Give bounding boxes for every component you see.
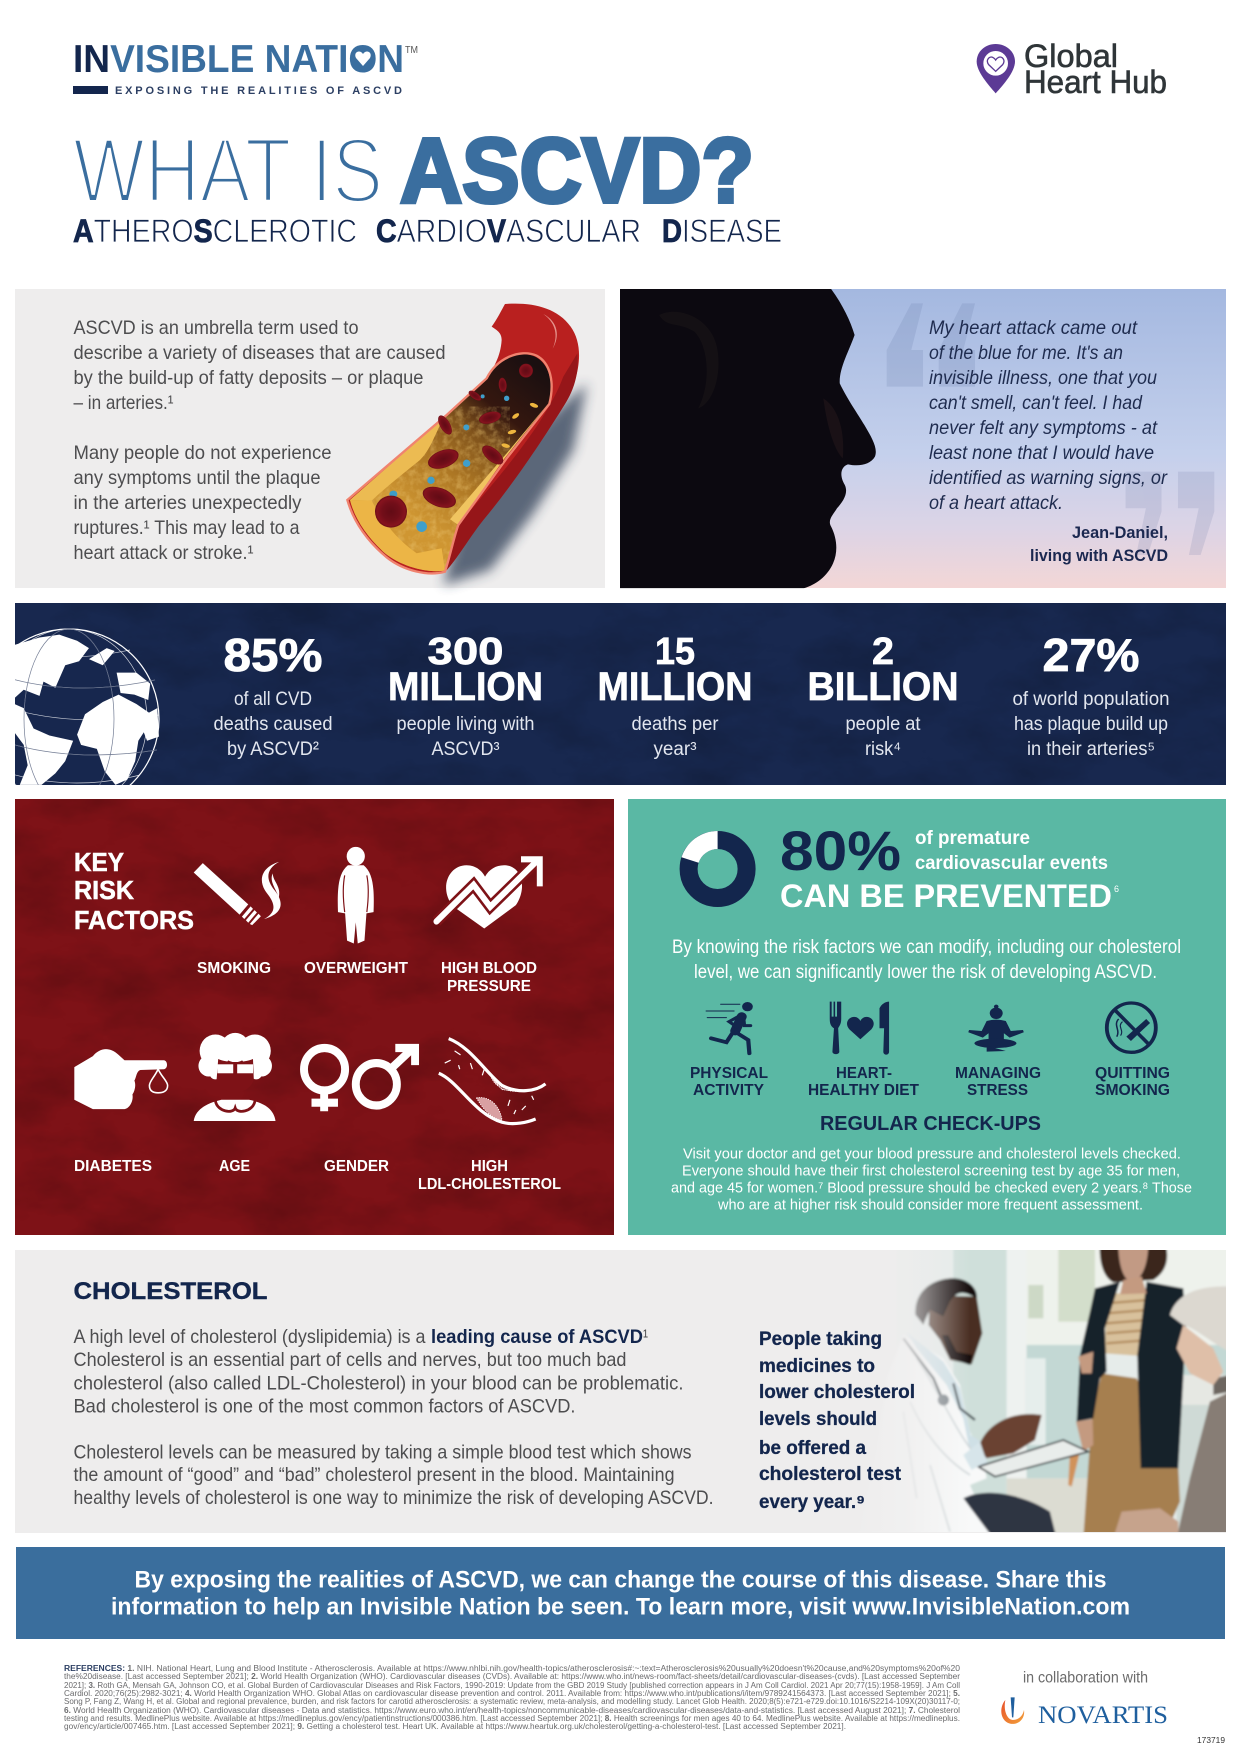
text block: intro: level, we can significantly lower the risk of developing ASCVD. (694, 962, 1157, 983)
panel: key risk factors (15, 799, 614, 1235)
subtitle (73, 213, 782, 249)
headline: 80% can be prevented: cardiovascular events (915, 853, 1108, 874)
subtitle: ATHEROSCLEROTIC (73, 213, 357, 249)
attribution: Jean-Daniel, (1072, 523, 1168, 542)
title: WHAT IS (73, 120, 383, 222)
references: 6. World Health Organization (WHO). Cardiovascular diseases - Data and statistics. https://www.euro.who.int/en/health-topics/noncommunicable-diseases/cardiovascular-diseases/data-and-statistics. [Last accessed August 2021]; 7. Cholesterol (64, 1706, 960, 1715)
text block: cholesterol explanation: Bad cholesterol is one of the most common factors of ASCVD. (74, 1396, 576, 1418)
panel: patient quote (620, 289, 1226, 588)
stat: 2 billion (808, 631, 958, 760)
logo: Invisible Nation: TM (405, 45, 418, 56)
icon: high blood pressure (436, 856, 543, 928)
labels: actions: HEALTHY DIET (808, 1082, 920, 1099)
attribution: living with ASCVD (1030, 546, 1168, 565)
text block: definition: in the arteries unexpectedly (74, 492, 302, 514)
headline: 80% can be prevented: 6 (1114, 884, 1119, 894)
icon: diabetes (74, 1049, 168, 1109)
callout: yearly test: be offered a (759, 1438, 866, 1459)
stat: 15 million: deaths per (632, 714, 719, 735)
stat: 27%: 27% (1042, 629, 1140, 681)
stat: 15 million: 15 (655, 631, 695, 673)
logo: Global Heart Hub (977, 38, 1167, 100)
logo: Global Heart Hub: Global (1024, 38, 1118, 74)
stat: 85%: of all CVD (234, 689, 312, 710)
logo: Novartis (1001, 1697, 1168, 1729)
callout: yearly test: People taking (759, 1329, 882, 1350)
stat: 85%: deaths caused (214, 714, 332, 735)
job code: 173719 (1197, 1736, 1226, 1745)
text block: quote: least none that I would have (929, 442, 1154, 464)
text block: cholesterol explanation: Cholesterol is an essential part of cells and nerves, but too much bad (74, 1349, 626, 1371)
text block: definition: any symptoms until the plaque (74, 467, 320, 489)
stat: 300 million: ASCVD³ (432, 739, 500, 760)
panel: cholesterol (15, 1242, 1237, 1538)
stat: 85%: 85% (224, 629, 322, 681)
labels: actions: MANAGING (955, 1065, 1041, 1082)
attribution (1030, 523, 1168, 565)
labels: actions: PHYSICAL (690, 1065, 768, 1082)
stat: 27%: in their arteries⁵ (1027, 739, 1155, 760)
text block: cholesterol explanation (74, 1326, 714, 1509)
icon: gender (304, 1048, 415, 1111)
text block: cholesterol explanation: Cholesterol levels can be measured by taking a simple blood test which shows (74, 1442, 692, 1464)
stat: 15 million (598, 631, 752, 760)
stat: 2 billion: 2 (872, 631, 894, 673)
text block: definition: describe a variety of diseases that are caused (74, 342, 446, 364)
stat: 2 billion: BILLION (808, 665, 958, 709)
callout: yearly test: levels should (759, 1409, 877, 1430)
headline: 80% can be prevented: 80% (780, 819, 901, 882)
references: Song P, Fang Z, Wang H, et al. Global and regional prevalence, burden, and risk factors for carotid atherosclerosis: a systematic review, meta-analysis, and modelling study. Lancet Glob Health. 2020;8(5):e721-e729.doi:10.1016/S2214-109X(20)30117-0; (64, 1697, 960, 1706)
stat: 27%: has plaque build up (1014, 714, 1168, 735)
icon: globe (15, 628, 160, 785)
heading: RISK (74, 877, 135, 905)
heading: KEY (74, 849, 124, 877)
headline: 80% can be prevented: CAN BE PREVENTED (780, 878, 1112, 914)
text block: definition: Many people do not experience (74, 442, 332, 464)
stat: 2 billion: risk⁴ (865, 739, 901, 760)
labels: row 2: HIGH (471, 1158, 508, 1175)
references: gov/ency/article/007465.htm. [Last accessed September 2021]; 9. Getting a cholesterol test. Heart UK. Available at https://www.heartuk.org.uk/cholesterol/getting-a-cholesterol-test. [Last accessed September 2021]. (64, 1722, 846, 1731)
text block: definition (74, 317, 446, 564)
text block: quote: My heart attack came out (929, 317, 1138, 339)
labels: actions: QUITTING (1095, 1065, 1170, 1082)
labels: row 1: HIGH BLOOD (441, 960, 537, 977)
tagline: EXPOSING THE REALITIES OF ASCVD (115, 85, 402, 97)
stat: 15 million: MILLION (598, 665, 752, 709)
stat: 300 million: MILLION (388, 665, 543, 709)
stat: 300 million: people living with (396, 714, 534, 735)
banner: call to action: By exposing the realities of ASCVD, we can change the course of this disease. Share this (134, 1566, 1106, 1594)
labels: actions (690, 1065, 1170, 1099)
labels: row 2: DIABETES (74, 1158, 152, 1175)
callout: yearly test: every year.⁹ (759, 1492, 865, 1513)
callout: yearly test: cholesterol test (759, 1464, 902, 1485)
labels: row 1: PRESSURE (447, 978, 531, 995)
logo: Global Heart Hub: Heart Hub (1024, 64, 1167, 100)
icon: managing stress (968, 1005, 1024, 1052)
text block: cholesterol explanation: the amount of “good” and “bad” cholesterol present in the blood. Maintaining (74, 1464, 674, 1486)
heading (74, 849, 194, 935)
text block: check-ups (671, 1146, 1192, 1214)
heading: FACTORS (74, 907, 194, 935)
text block: cholesterol explanation: healthy levels of cholesterol is one way to minimize the risk of developing ASCVD. (74, 1487, 714, 1509)
references: testing and results. MedlinePlus website. Available at https://medlineplus.gov/ency/patientinstructions/000386.htm. [Last accessed September 2021]; 8. Health screenings for men ages 40 to 64. MedlinePlus website. Available at https://medlineplus. (64, 1714, 960, 1723)
stat: 2 billion: people at (846, 714, 921, 735)
labels: row 2: LDL-CHOLESTEROL (418, 1176, 561, 1193)
text block: quote: of the blue for me. It's an (929, 342, 1123, 364)
text block: check-ups: Visit your doctor and get your blood pressure and cholesterol levels checked. (683, 1146, 1181, 1162)
stat: 85% (214, 629, 332, 760)
text block: cholesterol explanation: ¹ (643, 1326, 648, 1348)
older woman (1176, 1392, 1226, 1532)
panel: prevention (628, 799, 1226, 1235)
text block: cholesterol explanation: leading cause of ASCVD (431, 1326, 643, 1348)
wordmark: INVISIBLE NATION (73, 38, 404, 81)
references: REFERENCES: 1. NIH. National Heart, Lung and Blood Institute - Atherosclerosis. Available at https://www.nhlbi.nih.gov/health-topics/atherosclerosis#:~:text=Atherosclerosis%20usually%20doesn't%20cause,and%20symptoms%20of%20 (64, 1664, 961, 1673)
headline: 80% can be prevented (780, 819, 1119, 914)
stat: 27%: of world population (1012, 689, 1170, 710)
labels: row 2 (74, 1158, 561, 1193)
stat: 15 million: year³ (654, 739, 696, 760)
logo: Novartis: NOVARTIS (1038, 1702, 1168, 1729)
text block: definition: by the build-up of fatty deposits – or plaque (74, 367, 424, 389)
overlay: photo fade (853, 1250, 970, 1532)
references: 2021]; 3. Roth GA, Mensah GA, Johnson CO, et al. Global Burden of Cardiovascular Diseases and Risk Factors, 1990-2019: Update from the GBD 2019 Study [published correction appears in J Am Coll Cardiol. 2021 Apr 20;77(15):1958-1959]. J Am Coll (64, 1681, 960, 1690)
subtitle: CARDIOVASCULAR (376, 213, 641, 249)
text block: quote: never felt any symptoms - at (929, 417, 1158, 439)
doctor (920, 1358, 990, 1532)
stat: 300 million: 300 (428, 631, 504, 673)
text block: quote: of a heart attack. (929, 492, 1063, 514)
text block: quote: invisible illness, one that you (929, 367, 1157, 389)
photo: doctor consultation (902, 1250, 1226, 1532)
stat: 27% (1012, 629, 1170, 760)
callout: yearly test: medicines to (759, 1356, 875, 1377)
references: the%20disease. [Last accessed September 2021]; 2. World Health Organization (WHO). Cardiovascular diseases (CVDs). Available at: https://www.who.int/news-room/fact-sheets/detail/cardiovascular-diseases-(cvds). [Last accessed September (64, 1672, 960, 1681)
photo: face silhouette (620, 289, 876, 588)
labels: row 1 (197, 960, 537, 995)
icon: high LDL-cholesterol (439, 1039, 546, 1124)
panel: what is ASCVD (15, 289, 605, 588)
labels: row 1: SMOKING (197, 960, 271, 977)
heading: regular check-ups: REGULAR CHECK-UPS (820, 1112, 1041, 1135)
chart: donut 80% (682, 831, 747, 898)
heading: cholesterol: CHOLESTEROL (74, 1278, 268, 1305)
text block: definition: – in arteries.¹ (74, 392, 174, 414)
banner: call to action (16, 1547, 1225, 1639)
icon: overweight (338, 847, 374, 944)
icon: quitting smoking (1107, 1003, 1156, 1052)
quote mark: closing (1126, 472, 1214, 555)
headline: 80% can be prevented: of premature (915, 828, 1030, 849)
quote mark: opening (887, 303, 975, 387)
text block: definition: ruptures.¹ This may lead to a (74, 517, 300, 539)
icon: smoking (194, 862, 281, 925)
woman standing (1083, 1373, 1180, 1538)
banner: call to action: information to help an Invisible Nation be seen. To learn more, visit www.InvisibleNation.com (111, 1594, 1130, 1620)
labels: row 2: GENDER (324, 1158, 389, 1175)
callout: yearly test: lower cholesterol (759, 1382, 915, 1403)
icon: artery illustration (347, 304, 587, 585)
text block: check-ups: and age 45 for women.⁷ Blood pressure should be checked every 2 years.⁸ Those (671, 1180, 1192, 1196)
title: ASCVD? (400, 120, 754, 222)
labels: actions: SMOKING (1095, 1082, 1170, 1099)
text block: quote (929, 317, 1168, 514)
labels: actions: STRESS (967, 1082, 1028, 1099)
references (64, 1664, 961, 1731)
labels: row 2: AGE (219, 1158, 250, 1175)
subtitle: DISEASE (662, 213, 782, 249)
text block: cholesterol explanation: A high level of cholesterol (dyslipidemia) is a (74, 1326, 426, 1348)
labels: actions: ACTIVITY (693, 1082, 765, 1099)
text block: intro (672, 937, 1181, 983)
icon: physical activity (706, 1002, 753, 1053)
text block: intro: By knowing the risk factors we can modify, including our cholesterol (672, 937, 1181, 958)
text block: check-ups: Everyone should have their first cholesterol screening test by age 35 for men, (682, 1162, 1180, 1180)
text block: definition: ASCVD is an umbrella term used to (74, 317, 359, 339)
text block: definition: heart attack or stroke.¹ (74, 542, 254, 564)
text block: check-ups: who are at higher risk should consider more frequent assessment. (717, 1196, 1143, 1214)
callout: yearly test (759, 1329, 915, 1513)
collaboration credit: in collaboration with (1023, 1670, 1148, 1686)
text block: quote: identified as warning signs, or (929, 467, 1168, 489)
text block: cholesterol explanation: cholesterol (also called LDL-Cholesterol) in your blood can be problematic. (74, 1372, 684, 1394)
icon: heart-healthy diet (830, 1002, 889, 1055)
references: Cardiol. 2020;76(25):2982-3021; 4. World Health Organization WHO. Global Atlas on cardiovascular disease prevention and control. 2011. Available from: https://www.who.int/publications/i/item/9789241564373. [Last accessed September 2021]; 5. (64, 1689, 960, 1698)
text block: quote: can't smell, can't feel. I had (929, 392, 1143, 414)
logo: Invisible Nation (73, 38, 418, 97)
labels: actions: HEART- (836, 1065, 892, 1082)
icon: age (194, 1033, 276, 1121)
stat: 300 million (388, 631, 543, 760)
title (73, 120, 754, 222)
panel: statistics band (15, 603, 1226, 785)
stat: 85%: by ASCVD² (227, 739, 319, 760)
labels: row 1: OVERWEIGHT (304, 960, 409, 977)
